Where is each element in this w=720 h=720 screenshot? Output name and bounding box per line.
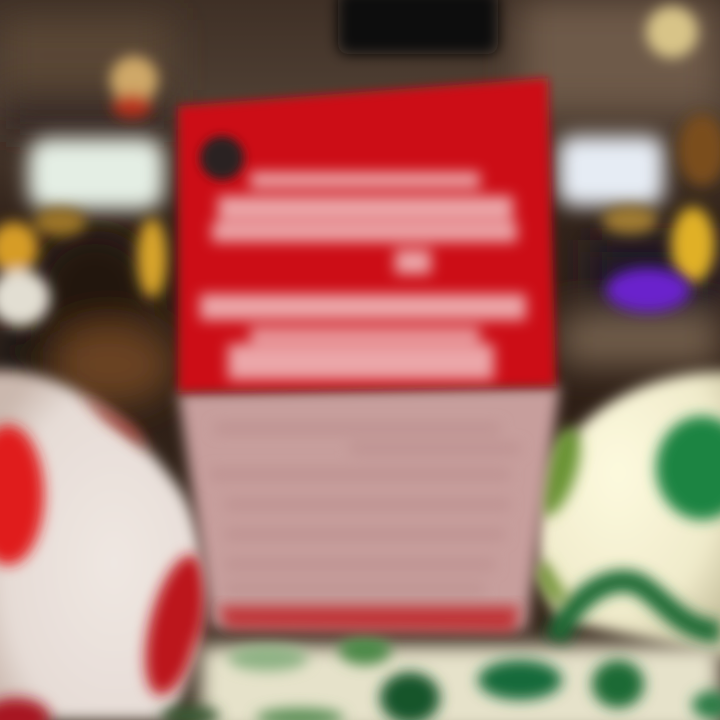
ceiling lamp right — [646, 6, 698, 58]
dark ceiling fixture — [338, 0, 498, 54]
purple light — [606, 268, 690, 312]
right light panel — [558, 136, 664, 206]
red spot bottom — [0, 698, 50, 720]
right egg — [527, 372, 720, 660]
bottom eggs and green pattern — [160, 565, 720, 720]
green spot large — [656, 416, 720, 520]
yellow lights — [0, 114, 720, 326]
left egg — [0, 370, 219, 720]
black circular logo — [200, 136, 244, 180]
ceiling lamp left — [110, 56, 158, 118]
red spot top-edge — [78, 392, 150, 452]
poster red header — [178, 78, 556, 392]
poster lower panel — [178, 386, 560, 632]
red spot right — [133, 549, 219, 701]
green spot edge — [527, 423, 589, 521]
bottom red strip — [218, 606, 520, 632]
background: ceiling and lights — [0, 0, 720, 405]
title third line — [200, 294, 526, 380]
red spot left — [0, 425, 44, 565]
left light panel — [28, 138, 164, 210]
body text lines — [210, 424, 520, 593]
title text block — [212, 172, 517, 274]
